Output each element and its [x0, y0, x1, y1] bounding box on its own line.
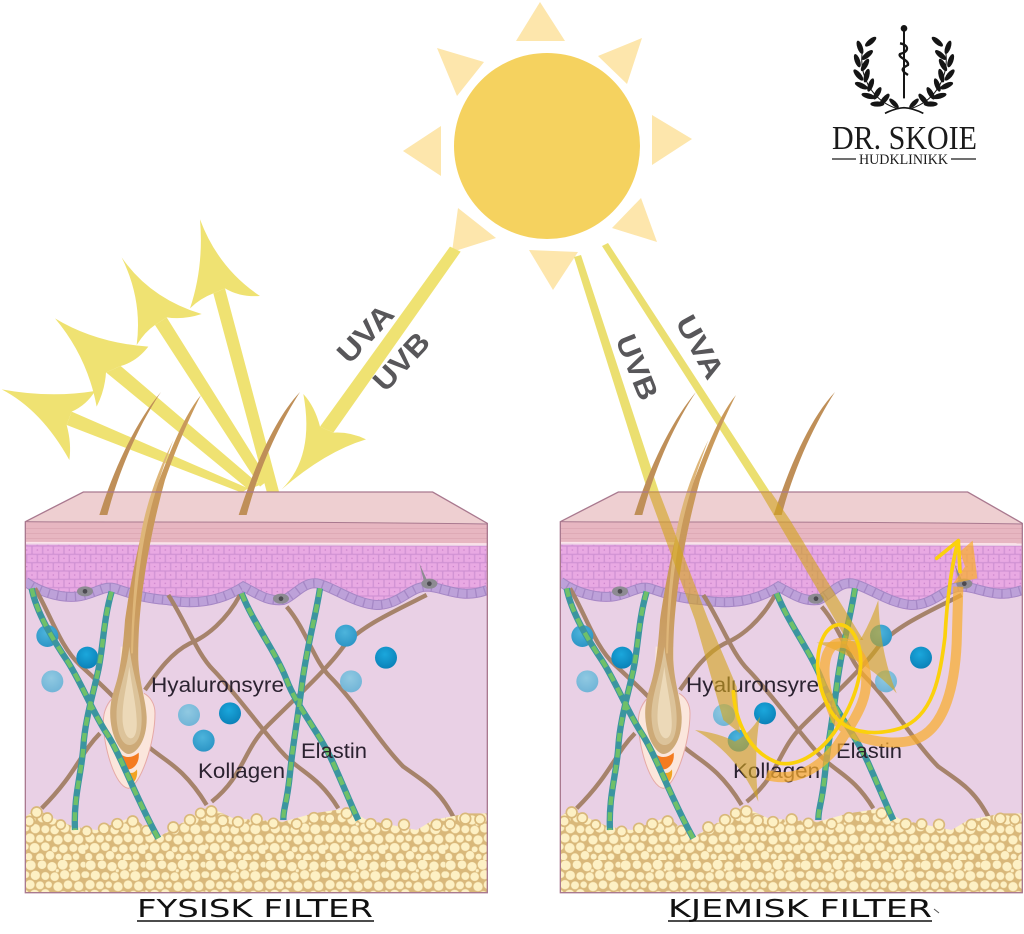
reflected arrow 3	[55, 318, 260, 489]
stratum corneum	[25, 522, 487, 544]
epidermis cells	[560, 545, 1022, 610]
label: Elastin right: Elastin	[836, 740, 902, 763]
heading: Fysisk filter: FYSISK FILTER	[137, 894, 373, 923]
label: Kollagen left: Kollagen	[198, 760, 285, 783]
collagen fibres	[35, 588, 455, 820]
label: UVB right: UVB	[609, 330, 664, 405]
melanocytes	[77, 563, 437, 604]
collagen fibres	[570, 588, 990, 820]
skin outline	[25, 492, 487, 893]
logo name: DR. SKOIE	[832, 120, 977, 157]
label: Hyaluronsyre left: Hyaluronsyre	[151, 674, 284, 697]
label: Hyaluronsyre right: Hyaluronsyre	[686, 674, 819, 697]
reflected arrow 2	[122, 257, 268, 487]
logo subtitle: HUDKLINIKK	[859, 152, 948, 168]
label: UVA right: UVA	[669, 310, 730, 385]
small hairs	[99, 392, 300, 515]
arrow: incoming UV left	[282, 247, 461, 489]
logo: Dr. Skoie Hudklinikk	[832, 25, 977, 168]
sun	[403, 2, 692, 290]
UV penetration overlay in right skin	[648, 492, 977, 802]
skin surface and dermis	[25, 492, 487, 893]
label: UVB left: UVB	[367, 326, 437, 398]
label: UVA left: UVA	[331, 298, 401, 370]
small hairs	[634, 392, 835, 515]
heading: Kjemisk filter: KJEMISK FILTER	[668, 894, 932, 923]
hyaluronic acid spheres	[36, 625, 397, 752]
elastin fibres	[32, 588, 358, 838]
UVB penetrating arrow	[648, 492, 760, 802]
sun rays	[403, 2, 692, 290]
hair follicle	[103, 395, 201, 788]
skin surface and dermis	[560, 492, 1022, 893]
elastin fibres	[567, 588, 893, 838]
label: Elastin left: Elastin	[301, 740, 367, 763]
fat layer	[559, 806, 1022, 893]
icon: laurel wreath and staff	[852, 25, 956, 113]
fat layer	[24, 806, 487, 893]
heading: Kjemisk filter	[668, 894, 939, 923]
sun disc	[454, 53, 640, 239]
arrow: UVB right shaft above skin	[574, 255, 659, 492]
arrows: reflected UV left	[2, 219, 279, 493]
panel: right skin cross-section	[559, 392, 1022, 893]
reflected arrow 4	[2, 389, 248, 493]
reflected arrow 1	[190, 219, 279, 492]
panel: left skin cross-section	[24, 392, 487, 893]
hyaluronic acid spheres	[571, 625, 932, 752]
scattered orange UVA path	[767, 541, 977, 777]
UVA penetrating arrow	[760, 492, 897, 693]
scattered yellow UVB path	[733, 541, 960, 764]
label: Kollagen right: Kollagen	[733, 760, 820, 783]
hair follicle	[638, 395, 736, 788]
stratum corneum	[560, 522, 1022, 544]
arrow: UVA right shaft above skin	[602, 243, 770, 492]
epidermis cells	[25, 545, 487, 610]
melanocytes	[612, 563, 972, 604]
skin outline	[560, 492, 1022, 893]
